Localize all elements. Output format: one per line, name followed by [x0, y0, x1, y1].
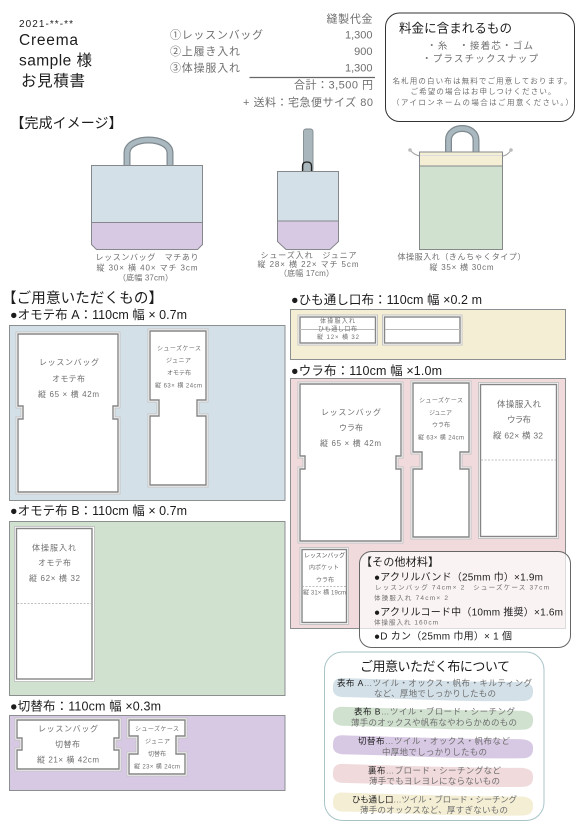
panel: omote fabric B [10, 522, 285, 696]
panel: other materials: 体操服入れ 74cm× 2 [374, 593, 448, 602]
pattern: gym bag outer [14, 526, 94, 682]
panel: other materials: 【その他材料】 [361, 554, 439, 568]
header: date, customer and title: Creema [19, 32, 78, 49]
pattern: shoe case outer: オモテ布 [167, 369, 191, 377]
pattern: shoe case outer [148, 329, 208, 487]
legend: switching fabric: 中厚地でしっかりしたもの [382, 747, 487, 757]
pattern: lesson bag outer: オモテ布 [52, 374, 85, 384]
pattern: shoe case lining: 縦 63× 横 24cm [418, 434, 464, 442]
panel: included in price: ・糸 ・接着芯・ゴム [427, 40, 533, 52]
legend: cord channel fabric: ひも通し口…ツイル・ブロード・シーチング [352, 794, 517, 804]
pattern: lesson bag switching: 切替布 [55, 739, 80, 749]
pattern: cord channel 1: 体操服入れ [320, 317, 355, 325]
pattern: gym bag lining: 体操服入れ [497, 399, 541, 409]
caption: shoe bag: シューズ入れ ジュニア [260, 250, 356, 260]
panel: omote fabric A [10, 326, 285, 500]
pattern: lesson bag outer: レッスンバッグ [39, 357, 99, 367]
price table: ②上履き入れ [170, 45, 240, 58]
heading: cord channel fabric: ●ひも通し口布：110cm 幅 ×0.2 m [291, 292, 482, 307]
panel: cord channel fabric [290, 310, 566, 360]
pattern: shoe case lining: ジュニア [429, 410, 452, 417]
caption: gym bag [398, 252, 526, 272]
pattern: gym bag lining [478, 382, 558, 538]
panel: included in price: ご希望の場合はお申しつけください。 [410, 86, 556, 96]
legend: switching fabric: 切替布…ツイル・オックス・帆布など [358, 736, 510, 746]
price table: 縫製代金 [326, 12, 372, 26]
pattern: shoe case switching: ジュニア [145, 738, 170, 746]
legend: cord channel fabric [333, 792, 533, 816]
pattern: cord channel 1 [298, 315, 378, 345]
legend: fabric B [333, 706, 533, 730]
pattern: shoe case switching: 切替布 [148, 750, 166, 758]
caption: lesson bag [96, 252, 198, 282]
illustration: lesson bag [92, 140, 202, 250]
legend: cord channel fabric: 薄手のオックスなど、厚すぎないもの [360, 805, 508, 815]
legend: fabric A: 表布 A…ツイル・オックス・帆布・キルティング [337, 678, 532, 688]
illustration: gym drawstring bag [408, 129, 513, 250]
caption: lesson bag: 縦 30× 横 40× マチ 3cm [96, 262, 198, 272]
panel: other materials: ●D カン（25mm 巾用）× 1 個 [374, 630, 512, 642]
panel: other materials: 体操服入れ 160cm [374, 618, 438, 626]
panel: other materials: ●アクリルコード中（10mm 推奨）×1.6m [374, 606, 563, 618]
caption: shoe bag: 縦 28× 横 22× マチ 5cm [258, 259, 359, 269]
pattern: lesson bag lining [298, 382, 403, 543]
pattern: shoe case switching [127, 718, 187, 776]
legend: fabric B: 薄手のオックスや帆布なやわらかめのもの [351, 718, 517, 728]
pattern: inner pocket: ウラ布 [316, 576, 334, 584]
heading: omote A: ●オモテ布 A：110cm 幅 × 0.7m [10, 307, 187, 322]
caption: shoe bag: （底幅 17cm） [279, 268, 334, 278]
pattern: inner pocket: 縦 31× 横 19cm [303, 588, 346, 596]
pattern: shoe case outer: 縦 63× 横 24cm [155, 382, 202, 390]
heading: omote B: ●オモテ布 B：110cm 幅 × 0.7m [10, 503, 187, 518]
panel: included in price: 料金に含まれるもの [399, 22, 512, 36]
price table: ①レッスンバッグ [170, 28, 263, 42]
legend: lining fabric: 裏布…ブロード・シーチングなど [368, 766, 501, 776]
price table: 1,300 [345, 62, 372, 74]
price table: + 送料：宅急便サイズ 80 [243, 95, 373, 109]
pattern: gym bag outer: 体操服入れ [32, 542, 76, 552]
pattern: inner pocket: レッスンバッグ [304, 552, 345, 560]
panel: about fabrics: ご用意いただく布について [360, 659, 510, 674]
pattern: gym bag lining: 縦 62× 横 32 [493, 430, 543, 440]
caption: lesson bag: （底幅 37cm） [118, 272, 173, 282]
header: date, customer and title: sample 様 [19, 52, 92, 70]
legend: lining fabric: 薄手でもヨレヨレにならないもの [369, 776, 500, 786]
pattern: shoe case lining [411, 381, 471, 539]
pattern: shoe case lining: シューズケース [419, 396, 463, 404]
heading: switching fabric: ●切替布：110cm 幅 ×0.3m [10, 698, 161, 714]
caption: gym bag: 縦 35× 横 30cm [430, 262, 494, 272]
panel: included in price: 名札用の白い布は無料でご用意しております。 [392, 76, 572, 86]
pattern: shoe case switching: 縦 23× 横 24cm [134, 762, 180, 770]
panel: lining fabric [290, 378, 566, 628]
heading: items to prepare: 【ご用意いただくもの】 [2, 290, 163, 307]
pattern: lesson bag outer [16, 332, 120, 494]
legend: lining fabric [333, 764, 533, 787]
pattern: lesson bag lining: ウラ布 [339, 422, 363, 432]
pattern: lesson bag outer: 縦 65 × 横 42m [38, 389, 99, 399]
pattern: inner pocket: 内ポケット [309, 564, 339, 572]
legend: fabric B: 表布 B…ツイル・ブロード・シーチング [354, 706, 515, 716]
pattern: gym bag outer: 縦 62× 横 32 [29, 573, 81, 583]
illustration: shoe bag [278, 129, 338, 250]
caption: gym bag: 体操服入れ（きんちゃくタイプ） [398, 252, 526, 262]
pattern: gym bag outer: オモテ布 [38, 558, 71, 568]
pattern: gym bag lining: ウラ布 [507, 414, 531, 424]
caption: shoe bag [258, 250, 359, 278]
pattern: shoe case lining: ウラ布 [432, 421, 450, 429]
price table: ③体操服入れ [170, 60, 240, 74]
pattern: inner pocket [300, 548, 348, 624]
header: date, customer and title: お見積書 [21, 72, 85, 90]
panel: other materials: ●アクリルバンド（25mm 巾）×1.9m [374, 570, 543, 584]
panel: included in price [386, 13, 574, 122]
pattern: shoe case outer: シューズケース [157, 344, 201, 352]
pattern: lesson bag switching: レッスンバッグ [38, 724, 98, 734]
legend: fabric A: など、厚地でしっかりしたもの [374, 688, 496, 698]
pattern: cord channel 2 [382, 315, 462, 345]
panel: other materials: レッスンバッグ 74cm× 2 シューズケース 37cm [375, 582, 549, 592]
legend: switching fabric [333, 735, 533, 758]
panel: switching fabric [10, 716, 285, 790]
panel: about fabrics [324, 652, 544, 820]
caption: lesson bag: レッスンバッグ マチあり [96, 252, 198, 262]
pattern: shoe case outer: ジュニア [166, 358, 191, 364]
legend: fabric A [333, 678, 533, 701]
price table: 1,300 [345, 30, 372, 42]
panel: included in price: （アイロンネームの場合はご用意ください。） [392, 97, 573, 107]
price table: 合計：3,500 円 [294, 78, 373, 92]
pattern: lesson bag switching: 縦 21× 横 42cm [37, 754, 99, 764]
pattern: shoe case switching: シューズケース [135, 725, 179, 733]
price table: 900 [354, 46, 372, 58]
panel: other materials [360, 552, 570, 648]
pattern: cord channel 1: ひも通し口布 [318, 325, 357, 333]
panel: included in price: ・プラスチックスナップ [422, 54, 538, 65]
pattern: lesson bag switching [15, 718, 121, 771]
pattern: lesson bag lining: 縦 65 × 横 42m [320, 438, 381, 448]
pattern: lesson bag lining: レッスンバッグ [321, 407, 381, 417]
pattern: cord channel 1: 縦 12× 横 32 [317, 333, 360, 341]
header: date, customer and title [19, 19, 92, 90]
heading: lining fabric: ●ウラ布：110cm 幅 ×1.0m [291, 363, 442, 378]
price table [170, 12, 375, 109]
header: date, customer and title: 2021-**-** [19, 19, 73, 30]
heading: finished image: 【完成イメージ】 [10, 115, 122, 131]
